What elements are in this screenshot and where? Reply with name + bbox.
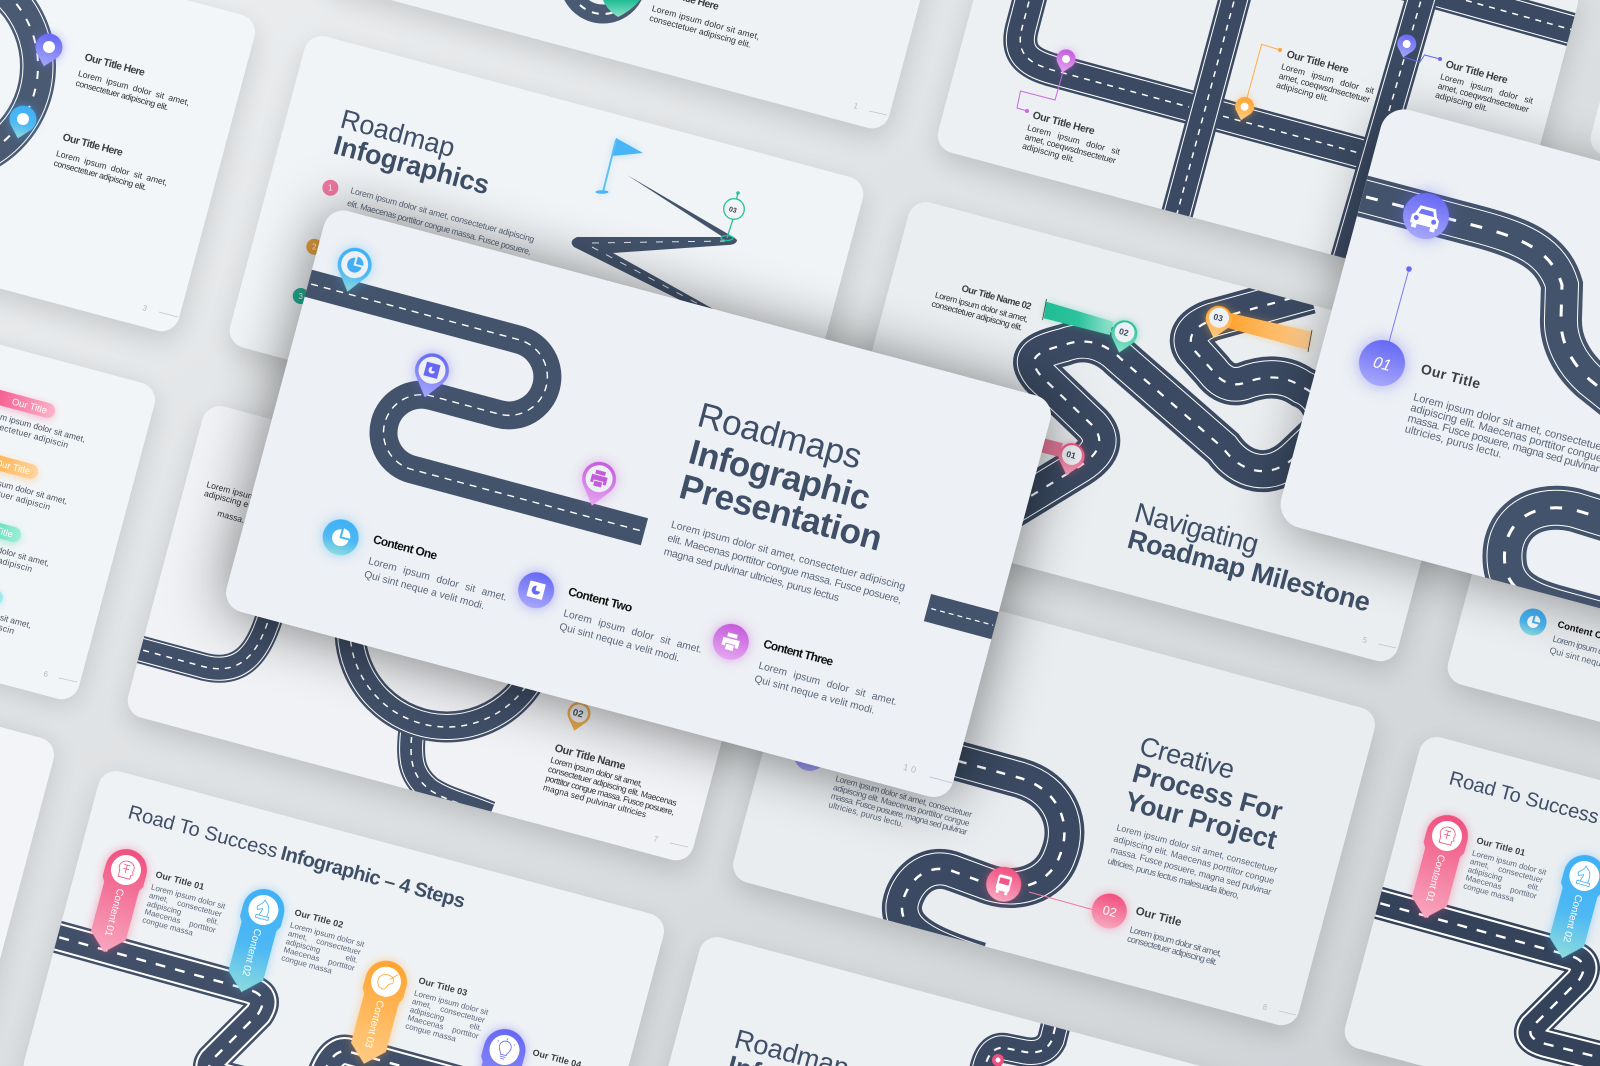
pill: teal: [0, 575, 5, 607]
left paragraph: Lorem ipsum dolor sit amet, consectetuer: [834, 773, 973, 819]
text block 01: amet, consectetuer: [1469, 857, 1544, 885]
pin: purple: [31, 31, 65, 70]
left text: adipiscing elit. Maecenas: [203, 488, 299, 522]
paragraph: magna sed pulvinar ultricies, purus lectus: [662, 546, 840, 604]
text block: porttitor congue massa. Fusce posuere,: [544, 773, 676, 817]
numbered dots: 3: [298, 292, 303, 301]
text block: consectetuer adipiscing elit.: [1126, 934, 1219, 967]
text block: adipiscing elit. Maecenas porttitor congue: [1409, 402, 1600, 465]
badge 02: 02: [1101, 903, 1118, 920]
connector: [1029, 892, 1094, 910]
icon: bus badge: [982, 863, 1025, 906]
text block 02: [280, 907, 370, 982]
text block: Lorem ipsum dolor sit amet,: [651, 3, 761, 42]
paragraph: Lorem ipsum dolor sit amet, consectetuer adipiscing: [670, 519, 907, 593]
text block: Our Title: [1419, 360, 1482, 392]
text block: title here 2: Lorem ipsum dolor sit amet,: [55, 148, 169, 188]
panel: main slide: [222, 206, 1055, 803]
body: Lorem ipsum dolor sit amet.: [367, 556, 508, 604]
text block 01: Maecenas porttitor: [144, 907, 217, 935]
body: Lorem ipsum dolor sit amet.: [757, 661, 898, 708]
body: Qui sint neque a velit modi.: [363, 569, 486, 612]
heading: Infographic: [685, 432, 875, 518]
text block: right: adipiscing elit.: [1434, 90, 1489, 113]
text block: title here 1: consectetuer adipiscing elit.: [75, 78, 170, 112]
panel: navigating roadmap milestone slide: [868, 202, 1430, 676]
text block 02: amet, consectetuer: [287, 929, 362, 957]
panel: roadmap infographics slide: [226, 32, 867, 503]
paragraph: elit. Maecenas porttitor congue massa. Fusce posuere,: [666, 532, 903, 606]
text block: magna sed pulvinar ultricies: [542, 782, 648, 819]
connector and pin: purple: [1017, 47, 1078, 113]
pin: purple square: [408, 350, 453, 402]
page number: 5: [1361, 635, 1369, 645]
heading: Creative: [1136, 731, 1238, 785]
pin: blue: [5, 103, 39, 142]
panel: right slide with car road: [1275, 104, 1600, 729]
text block 01: adipiscing elit.: [1467, 865, 1541, 893]
text block 02: adipiscing elit.: [285, 937, 359, 965]
paragraph: [1107, 822, 1278, 908]
arrow 01: Content 01: [102, 887, 125, 938]
arrow 02: Content 02: [1560, 893, 1584, 944]
paragraph: adipiscing elit. Maecenas porttitor congue: [1113, 833, 1275, 886]
text block: Our Title: [1134, 905, 1183, 929]
text block: title here 2: consectetuer adipiscing elit.: [53, 158, 148, 192]
label: Content Two: [567, 584, 634, 615]
page number: 6: [42, 669, 50, 679]
paragraph: Lorem ipsum dolor sit amet, consectetuer adipiscing: [349, 185, 536, 244]
text block 02: Maecenas porttitor: [283, 945, 356, 973]
connector and pin: blue: [1394, 32, 1442, 62]
panel: creative process slide: [729, 561, 1379, 1039]
text block 01: amet, consectetuer: [148, 891, 223, 919]
text block: left: amet, coeqwsdnsectetuer: [1024, 131, 1117, 166]
body: Qui sint neque a velit modi.: [753, 674, 876, 717]
heading: [126, 802, 468, 913]
text block 01: Lorem ipsum dolor sit: [150, 883, 227, 911]
text block: title here 1: Lorem ipsum dolor sit amet,: [77, 68, 191, 108]
text block: middle: Our Title Here: [1285, 48, 1350, 77]
text block 03: Lorem ipsum dolor sit: [413, 989, 490, 1017]
text block: [542, 742, 684, 826]
text block: [931, 277, 1033, 333]
left text: [199, 479, 310, 541]
feature: content one: [314, 515, 515, 617]
text block: middle: amet, coeqwsdnsectetuer: [1278, 70, 1371, 105]
numbered dots: 2: [312, 242, 317, 252]
panel: top-left slide with ring road: [0, 0, 259, 345]
pin 03: [721, 191, 744, 240]
panel: top-centre slide: [320, 0, 968, 142]
pin: green: [603, 0, 640, 17]
panel: top-right slide with road grid: [932, 0, 1583, 274]
panel: lower-left slide with pills: [0, 236, 159, 709]
heading: [330, 104, 500, 200]
body: Qui sint neque a velit modi.: [558, 622, 681, 664]
text block: left: adipiscing elit.: [1021, 141, 1076, 164]
pill: pink: [0, 388, 57, 420]
text block: [1549, 619, 1600, 683]
text block 01: adipiscing elit.: [146, 899, 220, 927]
left paragraph: ultricies, purus lectu.: [827, 799, 905, 829]
page number: 7: [652, 834, 660, 844]
arrow 02: [221, 884, 289, 998]
badge 01: 01: [1371, 354, 1393, 375]
panel: bottom roadmap infographics slide: [664, 937, 1200, 1066]
text block 01: Our Title 01: [1475, 835, 1526, 858]
panel: lower-centre slide with ring road: [120, 402, 772, 874]
text block: right: Lorem ipsum dolor sit: [1439, 71, 1535, 106]
paragraph: massa. Fusce posuere, magna sed pulvinar: [1110, 844, 1272, 897]
page number: [852, 101, 887, 115]
left text: Lorem ipsum dolor sit amet,: [205, 479, 310, 516]
label: Content Three: [762, 637, 835, 669]
text block: right: amet, coeqwsdnsectetuer: [1437, 80, 1530, 115]
pin 01: [1054, 440, 1088, 479]
road: [970, 1023, 1070, 1066]
icon: blue pie: [1516, 605, 1550, 639]
road: winding: [269, 283, 684, 532]
text block 01: [141, 869, 231, 944]
pin 01: 01: [1065, 449, 1077, 461]
connector: [1389, 266, 1412, 342]
page number: 1: [852, 101, 860, 111]
pin: [992, 1054, 1004, 1066]
body: Lorem ipsum dolor sit amet.: [562, 608, 703, 656]
text block: consectetuer adipiscing elit.: [931, 299, 1024, 333]
heading: Presentation: [675, 467, 886, 559]
text block 02: Lorem ipsum dolor sit: [289, 921, 366, 949]
winding road: [985, 293, 1325, 524]
page number: 8: [1261, 1002, 1269, 1012]
pin 03: 03: [728, 206, 737, 215]
numbered dots: 1: [328, 184, 333, 192]
icon: square pie: [514, 568, 558, 612]
text block: title here 1: Our Title Here: [83, 51, 146, 79]
icon: car badge: [1398, 188, 1454, 244]
text block 03: adipiscing elit.: [409, 1005, 483, 1033]
heading: Roadmaps: [694, 395, 866, 477]
page number: [1261, 1002, 1296, 1015]
pin 02: 02: [1118, 326, 1130, 338]
badge 02: [1088, 890, 1131, 932]
text block 01: Our Title 01: [154, 869, 205, 892]
text block: consectetuer adipiscing elit.: [648, 13, 752, 50]
arrow 04: [462, 1024, 530, 1066]
pill: green: [0, 512, 23, 544]
text block 01: Lorem ipsum dolor sit: [1471, 849, 1548, 877]
text block 03: Our Title 03: [417, 975, 468, 998]
text block: Lorem ipsum dolor sit amet,: [549, 755, 644, 789]
arrow 03: Content 03: [362, 999, 385, 1049]
panel: far bottom-left blank slide: [0, 591, 58, 1055]
page number: 10: [902, 762, 920, 776]
label: Content One: [372, 532, 439, 563]
text block: left: Our Title Here: [1031, 109, 1096, 138]
text block: right: Our Title Here: [1444, 58, 1509, 87]
road: [900, 745, 1064, 962]
text block 03: amet, consectetuer: [411, 997, 486, 1025]
road: [40, 932, 470, 1066]
text block 03: Maecenas porttitor: [407, 1013, 480, 1041]
text block: massa. Fusce posuere, magna sed pulvinar: [1406, 413, 1600, 476]
heading: Infographics: [330, 130, 493, 200]
icon: printer: [709, 620, 753, 664]
road grid: [1020, 0, 1580, 280]
left paragraph: adipiscing elit. Maecenas porttitor congue: [832, 782, 971, 828]
heading: Infographic – 4 Steps: [278, 842, 468, 913]
heading: Roadmap Milestone: [1124, 524, 1374, 618]
text block 03: congue massa: [404, 1021, 457, 1044]
text block 01: Maecenas porttitor: [1465, 873, 1538, 901]
arrow 02: [1542, 850, 1600, 964]
panel: far top-right slide sliver: [1587, 0, 1600, 302]
page number: [141, 303, 178, 317]
arrow 03: [344, 956, 412, 1066]
ring road: [0, 0, 38, 166]
text block: [1403, 360, 1600, 486]
pin 02: [563, 699, 593, 734]
text block: left: Lorem ipsum dolor sit: [1026, 122, 1122, 157]
arrow 02: Content 02: [239, 927, 263, 978]
road: right stub: [927, 608, 995, 626]
icon: pie: [319, 515, 363, 559]
paragraph: elit. Maecenas porttitor congue massa. Fusce posuere,: [346, 198, 532, 257]
panel: small slide behind right card: [1444, 369, 1600, 841]
flag: orange: [1228, 313, 1312, 352]
feature: content three: [704, 620, 906, 722]
text block: Lorem ipsum dolor sit amet,: [1129, 924, 1223, 959]
arrow 01: [1405, 810, 1473, 924]
page number: [902, 762, 955, 785]
flag: pink: [996, 427, 1063, 457]
pin: magenta printer: [575, 458, 620, 510]
panel: road to success slide: [20, 767, 668, 1066]
road: [1361, 898, 1600, 1066]
pill: pink: Our Title: [11, 397, 48, 417]
text block: middle: adipiscing elit.: [1275, 80, 1330, 103]
arrow 01: Content 01: [1423, 853, 1446, 904]
roads: [137, 616, 541, 812]
flag: [596, 138, 643, 194]
road arc: [569, 0, 637, 14]
text block 02: congue massa: [280, 953, 333, 976]
heading: [1122, 731, 1295, 855]
arrow 01: [84, 844, 152, 958]
heading: Roadmap: [337, 104, 458, 163]
heading: Process For: [1129, 758, 1286, 827]
text block: consectetuer adipiscing elit. Maecenas: [547, 764, 678, 808]
text block: Our Title Name 02: [960, 283, 1033, 313]
pill: orange: [0, 449, 40, 481]
text block 01: congue massa: [1462, 881, 1515, 904]
zigzag road: [572, 175, 737, 310]
text block: right: [1434, 58, 1538, 124]
connector and pin: orange: [1232, 44, 1282, 123]
heading: Road To Success: [126, 802, 280, 863]
numbered dots: [293, 180, 338, 304]
text block: middle: Lorem ipsum dolor sit: [1280, 61, 1376, 96]
panel: bottom-right road to success slide: [1341, 733, 1600, 1066]
text block 02: Our Title 02: [293, 907, 344, 930]
feature: content two: [510, 568, 710, 669]
pin 02: 02: [571, 707, 584, 720]
paragraph: ultricies, purus lectus malesuada libero,: [1107, 856, 1241, 900]
pin 02: [1107, 317, 1140, 356]
heading: Your Project: [1122, 786, 1280, 855]
text block: middle: [1275, 48, 1379, 114]
text block: title here 2: [53, 131, 173, 197]
badge 01: [1354, 335, 1410, 391]
text block 01: [1464, 838, 1546, 902]
left paragraph: massa. Fusce posuere, magna sed pulvinar: [830, 791, 969, 837]
text block: left: [1021, 109, 1125, 175]
heading: Road To Success: [1447, 768, 1600, 829]
paragraph: Lorem ipsum dolor sit amet, consectetuer: [1115, 822, 1278, 875]
page number: 3: [141, 303, 149, 313]
text block: Our Title Name: [553, 742, 627, 773]
page number: [652, 834, 688, 847]
pin: blue pie: [331, 244, 375, 296]
lower road: [1504, 508, 1600, 630]
text block: ultricies, purus lectu.: [1403, 423, 1503, 461]
text block 4: [0, 593, 32, 640]
text block: title here 2: Our Title Here: [61, 131, 124, 159]
hidden circle: [794, 739, 826, 771]
text block: Lorem ipsum dolor sit amet,: [934, 290, 1029, 324]
flag: green: [1042, 299, 1113, 335]
text block 2: [0, 469, 68, 516]
heading: Navigating: [1131, 497, 1262, 560]
text block: title here 1: [75, 51, 195, 117]
page number: [42, 669, 77, 682]
text block: [1126, 905, 1228, 968]
heading: [674, 395, 906, 559]
upper road: [1340, 190, 1600, 420]
page number: [1361, 635, 1396, 648]
pin 03: 03: [1212, 311, 1224, 324]
left paragraph: [827, 773, 974, 846]
pin 03: [1201, 303, 1235, 341]
left text: massa. Fusce: [216, 508, 271, 532]
text block 03: [404, 975, 494, 1050]
text block 01: congue massa: [141, 915, 194, 938]
text block 3: [0, 531, 50, 578]
